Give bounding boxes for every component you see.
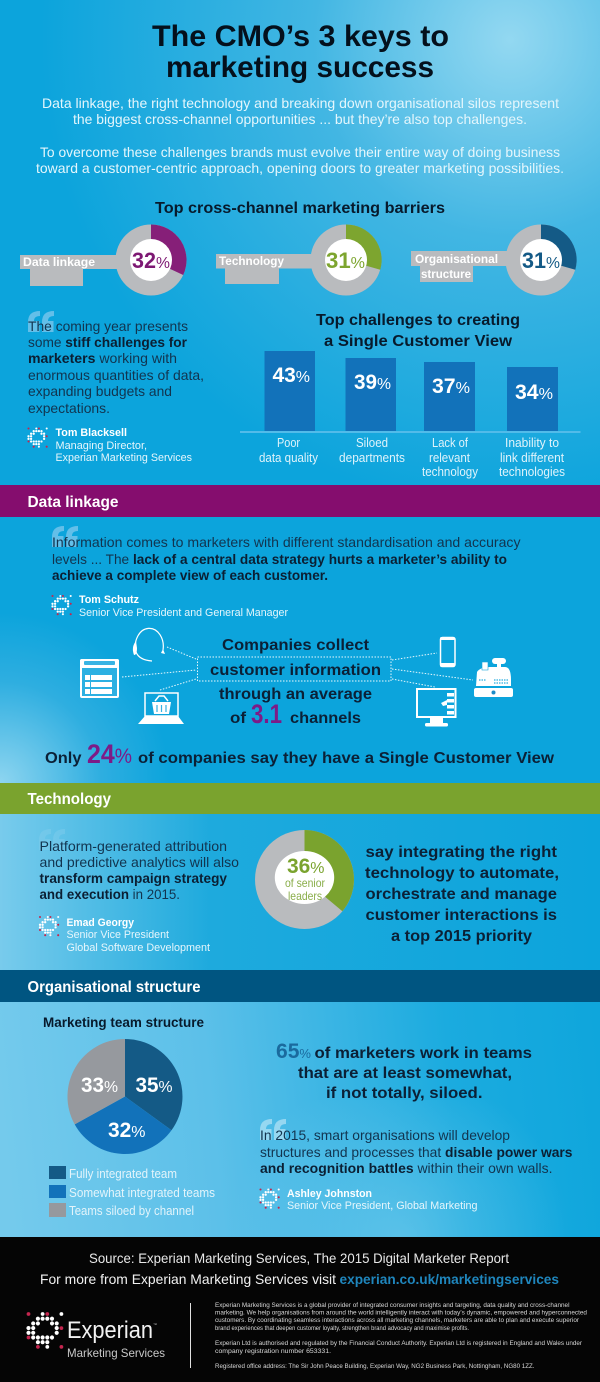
legal small print: customers. By coordinating seamless interactions across all marketing channels, marketers are able to plan and execute superior (215, 1317, 580, 1324)
icon: laptop with basket (138, 693, 184, 724)
background: technology section (0, 813, 600, 971)
title: marketing success (166, 51, 434, 84)
stat: only 24% (45, 739, 555, 769)
stat text: integrating technology priority: say integrating the right (366, 844, 558, 861)
call to action: For more from Experian Marketing Services visit (40, 1271, 336, 1287)
section band: organisational structure: Organisational structure (28, 979, 201, 996)
quote: Tom Blacksell: Managing Director, (56, 440, 147, 452)
pie chart: marketing team structure: 35% (136, 1074, 172, 1097)
intro text: Data linkage, the right technology and breaking down organisational silos represent (42, 95, 559, 111)
quote: Tom Schutz: Information comes to marketers with different standardisation and accuracy (52, 534, 520, 550)
quote: Tom Blacksell: expectations. (28, 400, 110, 416)
legal small print: Experian Marketing Services is a global provider of integrated consumer insights and targeting, data quality and cross-channel (215, 1302, 570, 1309)
quote: Tom Blacksell (27, 311, 204, 464)
bar chart: top challenges: 34% (515, 381, 553, 404)
stat: only 24%: 24% (87, 739, 132, 769)
bar chart: top challenges: Poor (277, 436, 300, 450)
key chart: technology 31% (216, 224, 382, 296)
icon: browser window (80, 659, 119, 698)
heading: top challenges to creating a single customer view: Top challenges to creating (316, 312, 520, 329)
bar chart: top challenges: 43% (272, 364, 310, 387)
quote: Tom Blacksell: enormous quantities of data, (28, 367, 204, 383)
bar chart: top challenges: Inability to (505, 436, 559, 450)
call to action: experian.co.uk/marketingservices (340, 1271, 559, 1287)
quote: Emad Georgy: and execution in 2015. (40, 886, 180, 902)
key chart: organisational structure 31%: Organisational (415, 252, 498, 266)
Experian logo (26, 1312, 165, 1360)
background: data linkage section (0, 516, 600, 784)
legend: team structure: Fully integrated team (69, 1167, 177, 1181)
quote: Emad Georgy: transform campaign strategy (40, 870, 227, 886)
callout: companies collect customer information: through an average (219, 686, 372, 703)
icon: touch-screen monitor (417, 689, 456, 726)
stat: only 24%: Only (45, 750, 82, 767)
pie chart: marketing team structure: 32% (108, 1119, 146, 1142)
stat: 65% of marketers (276, 1040, 532, 1102)
bar chart: top challenges: departments (339, 451, 405, 465)
legal small print (215, 1302, 587, 1370)
pie chart: marketing team structure (67, 1039, 182, 1154)
legend: team structure: Somewhat integrated teams (69, 1186, 215, 1200)
bar chart: top challenges: data quality (259, 451, 319, 465)
intro text: To overcome these challenges brands must evolve their entire way of doing business (40, 144, 560, 160)
donut chart: 36% of senior leaders: leaders (288, 889, 322, 903)
diagram: dotted connector lines (122, 647, 473, 690)
heading: top cross-channel marketing barriers: Top cross-channel marketing barriers (155, 200, 445, 217)
heading: marketing team structure: Marketing team structure (43, 1015, 204, 1030)
quote: Emad Georgy: Platform-generated attribution (40, 838, 227, 854)
section band: technology: Technology (28, 791, 111, 808)
quote: Emad Georgy: Emad Georgy (66, 917, 135, 929)
background: intro section (0, 0, 600, 486)
callout: companies collect customer information: channels (290, 710, 361, 727)
donut chart: 36% of senior leaders: of senior (285, 876, 325, 890)
bar chart: top challenges: Lack of (432, 436, 468, 450)
quote: Tom Blacksell: some stiff challenges for (28, 334, 188, 350)
quote: Tom Blacksell: marketers working with (28, 350, 177, 366)
title: The CMO’s 3 keys to (152, 20, 449, 53)
background: organisational structure section (0, 1001, 600, 1238)
quote: Ashley Johnston (259, 1119, 573, 1212)
callout: companies collect customer information: 3.1 (251, 699, 282, 729)
intro text: the biggest cross-channel opportunities ... but they’re also top challenges. (73, 111, 527, 127)
quote: Emad Georgy: Global Software Development (66, 942, 210, 954)
section band: organisational structure (0, 970, 600, 1002)
footer panel (0, 1237, 600, 1382)
key chart: organisational structure 31%: structure (421, 267, 471, 281)
quote: Ashley Johnston: Ashley Johnston (287, 1188, 372, 1200)
key chart: data linkage 32%: Data linkage (23, 255, 95, 269)
heading: top challenges to creating a single customer view: a Single Customer View (324, 333, 513, 350)
source line: Source: Experian Marketing Services, The 2015 Digital Marketer Report (89, 1250, 509, 1266)
key chart: organisational structure 31% (411, 224, 577, 296)
donut chart: 36% of senior leaders: 36% (287, 855, 324, 878)
Experian logo: ™ (153, 1322, 157, 1327)
callout: companies collect customer information: of (230, 710, 247, 727)
bar chart: top challenges: technology (422, 465, 479, 479)
bar chart: top challenges: 37% (432, 375, 470, 398)
section band: technology (0, 783, 600, 814)
callout: companies collect customer information: customer information (210, 662, 381, 679)
title (152, 20, 449, 84)
quote: Emad Georgy (39, 829, 239, 954)
stat text: integrating technology priority: orchestrate and manage (366, 886, 557, 903)
stat: 65% of marketers: 65% (276, 1040, 311, 1063)
quote: Tom Schutz: Senior Vice President and General Manager (79, 607, 288, 619)
legal small print: marketing. We help organisations from around the world intelligently interact with today’s dynamic, empowered and hyperconnected (215, 1310, 587, 1316)
section band: data linkage: Data linkage (28, 494, 119, 511)
heading: top challenges to creating a single customer view (316, 312, 520, 350)
callout: dotted box (198, 657, 391, 681)
donut chart: 36% of senior leaders (255, 830, 354, 929)
stat text: integrating technology priority (365, 844, 559, 945)
quote: Emad Georgy: and predictive analytics will also (40, 854, 239, 870)
quote: Tom Schutz: achieve a complete view of each customer. (52, 567, 328, 583)
legend: team structure (49, 1166, 215, 1218)
bar chart: top challenges: relevant (429, 451, 470, 465)
icon: cash register (474, 658, 513, 697)
quote: Tom Schutz: Tom Schutz (79, 594, 139, 606)
intro text: toward a customer-centric approach, opening doors to greater marketing possibilities. (36, 160, 564, 176)
bar chart: top challenges: 39% (354, 371, 391, 394)
key chart: technology 31%: 31% (326, 248, 365, 273)
bar chart: top challenges (240, 351, 580, 479)
stat: 65% of marketers: if not totally, siloed. (326, 1085, 482, 1102)
stat text: integrating technology priority: customer interactions is (366, 907, 557, 924)
pie chart: marketing team structure: 33% (81, 1074, 118, 1097)
quote: Ashley Johnston: Senior Vice President, Global Marketing (287, 1200, 478, 1212)
stat: 65% of marketers: that are at least somewhat, (298, 1065, 512, 1082)
quote: Tom Schutz: levels ... The lack of a central data strategy hurts a marketer’s ability to (52, 551, 507, 567)
quote: Tom Schutz (51, 526, 521, 619)
legal small print: brand experiences that deepen customer loyalty, strengthen brand advocacy and maximise profits. (215, 1325, 469, 1332)
bar chart: top challenges: technologies (499, 465, 565, 479)
quote: Tom Blacksell: The coming year presents (28, 318, 188, 334)
callout: companies collect customer information: Companies collect (222, 637, 370, 654)
call to action (40, 1271, 559, 1287)
quote: Tom Blacksell: Tom Blacksell (56, 427, 127, 439)
quote: Tom Blacksell: expanding budgets and (28, 383, 172, 399)
icon: smartphone (440, 637, 455, 667)
Experian logo: Marketing Services (67, 1346, 165, 1360)
quote: Ashley Johnston: structures and processes that disable power wars (260, 1144, 573, 1160)
key chart: organisational structure 31%: 31% (522, 248, 560, 273)
key chart: data linkage 32%: 32% (132, 248, 170, 273)
quote: Tom Blacksell: Experian Marketing Services (56, 452, 192, 464)
stat: only 24%: of companies say they have a Single Customer View (138, 750, 555, 767)
section band: data linkage (0, 485, 600, 517)
intro text (36, 95, 564, 176)
quote: Ashley Johnston: In 2015, smart organisations will develop (260, 1127, 510, 1143)
legal small print: Registered office address: The Sir John Peace Building, Experian Way, NG2 Business Park, Nottingham, NG80 1ZZ. (215, 1363, 535, 1370)
quote: Ashley Johnston: and recognition battles within their own walls. (260, 1160, 552, 1176)
bar chart: top challenges: link different (500, 451, 564, 465)
stat text: integrating technology priority: a top 2015 priority (391, 928, 532, 945)
legal small print: company registration number 653331. (215, 1348, 331, 1355)
stat text: integrating technology priority: technology to automate, (365, 865, 559, 882)
key chart: technology 31%: Technology (219, 254, 284, 268)
stat: 65% of marketers: of marketers work in teams (314, 1045, 532, 1062)
quote: Emad Georgy: Senior Vice President (66, 929, 169, 941)
bar chart: top challenges: Siloed (356, 436, 388, 450)
legal small print: Experian Ltd is authorised and regulated by the Financial Conduct Authority. Experian Ltd is registered in England and Wales under (215, 1340, 583, 1347)
key chart: data linkage 32% (20, 224, 187, 296)
icon: headset (133, 628, 165, 661)
callout: companies collect customer information (210, 637, 381, 729)
Experian logo: Experian (67, 1317, 153, 1344)
legend: team structure: Teams siloed by channel (69, 1204, 194, 1218)
